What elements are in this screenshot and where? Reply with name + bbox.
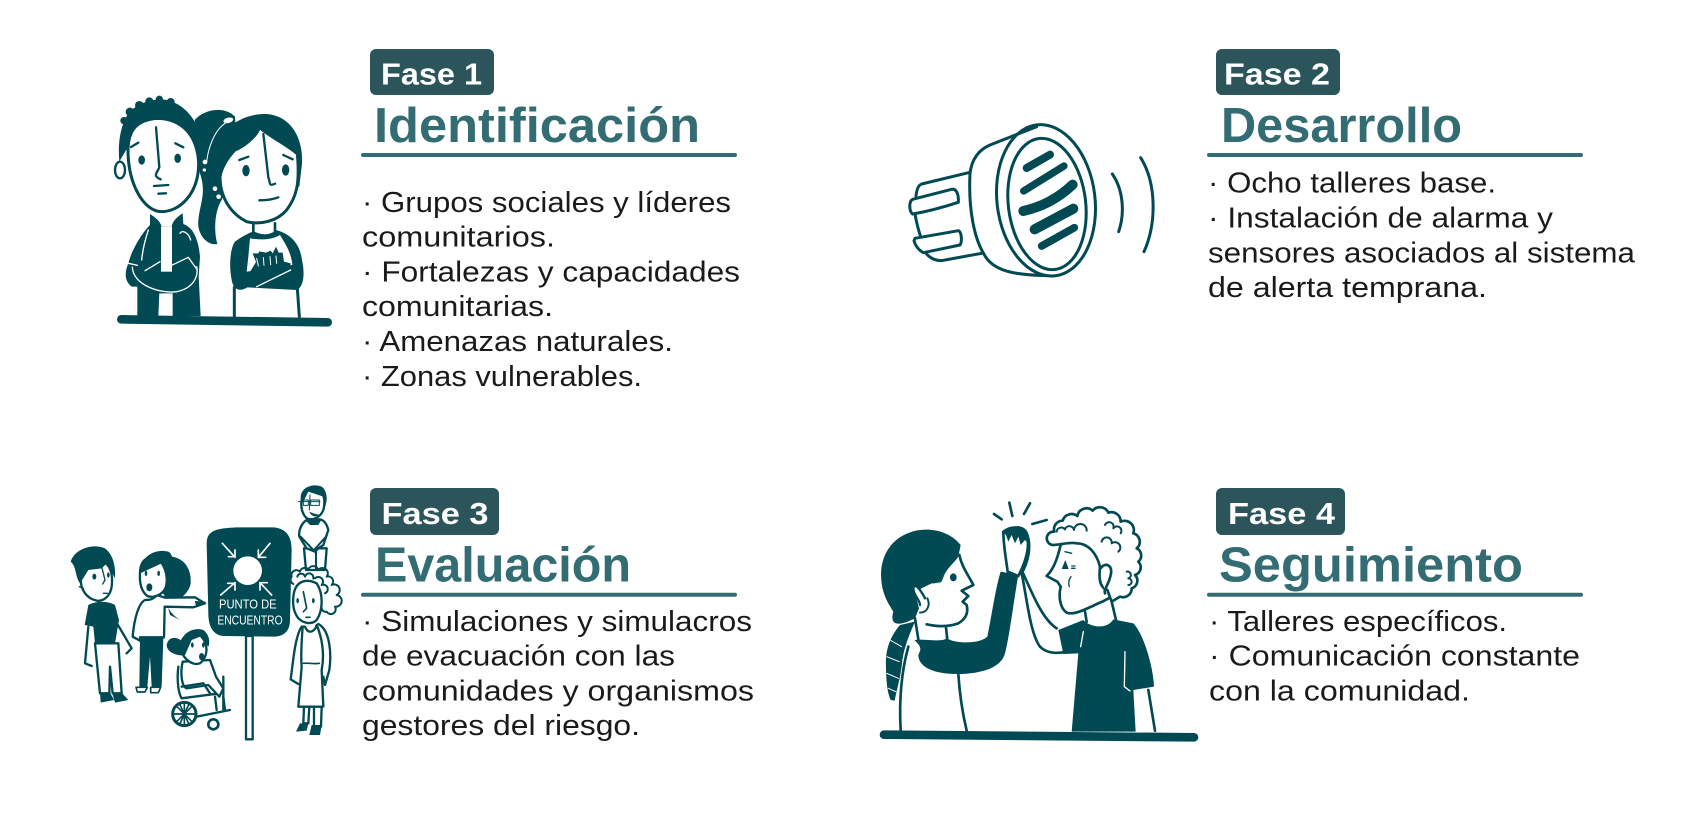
woman with curly hair	[291, 566, 342, 735]
woman body	[900, 647, 967, 731]
panel: fase 4	[881, 488, 1583, 737]
illustration: people at meeting point sign	[71, 485, 342, 739]
text block: fase 2 list: sensores asociados al sistema	[1208, 237, 1636, 269]
woman pointing	[133, 551, 206, 693]
hand	[1003, 527, 1028, 576]
shirt	[1058, 619, 1154, 732]
panel: fase 3	[71, 485, 754, 742]
badge: Fase 1	[370, 49, 494, 95]
badge: Fase 3	[370, 488, 499, 535]
man left	[71, 546, 132, 703]
text block: fase 1 list: · Amenazas naturales.	[362, 326, 673, 358]
illustration: two people standing with arms crossed	[115, 96, 328, 322]
heading: Identificación: Identificación	[374, 99, 700, 153]
text block: fase 1 list: · Grupos sociales y líderes	[362, 187, 731, 219]
text block: fase 3 list	[362, 606, 754, 742]
icon: alarm siren	[910, 119, 1153, 282]
panel: fase 1	[115, 49, 740, 393]
sign: ENCUENTRO	[217, 613, 283, 628]
woman	[195, 110, 237, 244]
text block: fase 2 list: · Ocho talleres base.	[1208, 168, 1496, 200]
text block: fase 2 list: · Instalación de alarma y	[1208, 202, 1554, 234]
man	[115, 162, 125, 178]
face	[915, 555, 973, 626]
badge: Fase 2	[1216, 49, 1340, 95]
heading: Desarrollo: Desarrollo	[1221, 99, 1462, 153]
illustration: two people high-fiving	[881, 503, 1194, 737]
text block: fase 1 list: · Zonas vulnerables.	[362, 361, 642, 393]
text block: fase 3 list: de evacuación con las	[362, 641, 675, 673]
badge: Fase 4	[1216, 488, 1345, 535]
sign: PUNTO DE	[219, 598, 277, 612]
text block: fase 4 list: con la comunidad.	[1209, 676, 1470, 708]
text block: fase 3 list: comunidades y organismos	[362, 676, 754, 708]
heading: Evaluación: Evaluación	[375, 538, 631, 592]
text block: fase 4 list: · Comunicación constante	[1209, 641, 1580, 673]
sign	[207, 527, 292, 739]
neck	[915, 618, 947, 640]
badge: Fase 1: Fase 1	[381, 56, 482, 92]
man's arm	[1022, 533, 1063, 653]
text block: fase 1 list	[362, 187, 740, 393]
man's head	[1047, 538, 1117, 613]
panel: fase 2	[910, 49, 1636, 304]
man with glasses	[298, 485, 328, 570]
heading: Seguimiento: Seguimiento	[1219, 538, 1523, 592]
text block: fase 1 list: · Fortalezas y capacidades	[362, 256, 740, 288]
text block: fase 1 list: comunitarios.	[362, 222, 555, 254]
text block: fase 2 list	[1208, 168, 1636, 304]
badge: Fase 3: Fase 3	[382, 496, 488, 531]
text block: fase 3 list: · Simulaciones y simulacros	[362, 606, 752, 638]
woman in wheelchair	[167, 629, 230, 729]
badge: Fase 2: Fase 2	[1224, 56, 1330, 92]
sweater	[914, 572, 1018, 674]
text block: fase 4 list: · Talleres específicos.	[1209, 606, 1507, 638]
text block: fase 3 list: gestores del riesgo.	[362, 710, 640, 742]
text block: fase 4 list	[1209, 606, 1580, 708]
text block: fase 1 list: comunitarias.	[362, 291, 553, 323]
braid	[886, 622, 915, 701]
badge: Fase 4: Fase 4	[1228, 496, 1336, 531]
text block: fase 2 list: de alerta temprana.	[1208, 272, 1487, 304]
hair	[881, 530, 961, 624]
